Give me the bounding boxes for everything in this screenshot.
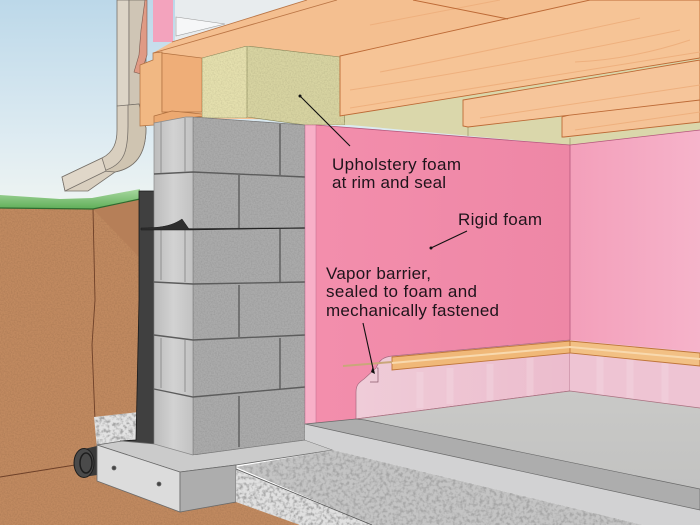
pink rigid foam wall <box>305 125 700 424</box>
sky <box>0 0 700 205</box>
gravel front <box>236 469 372 525</box>
upper house background <box>153 0 310 42</box>
callout: vapor barrier: mechanically fastened <box>326 301 499 320</box>
second joist <box>463 60 700 127</box>
slab light edge <box>305 424 700 525</box>
callout: upholstery foam: Upholstery foam <box>332 155 461 174</box>
slab surface <box>356 391 700 489</box>
right wall <box>570 130 700 408</box>
joists <box>340 0 700 137</box>
icon: gutter strap <box>134 0 147 74</box>
first joist <box>340 0 700 116</box>
downspout <box>62 0 146 191</box>
block wall <box>141 117 305 455</box>
soil <box>0 199 300 525</box>
gravel top <box>236 450 643 525</box>
callout: vapor barrier: sealed to foam and <box>326 282 477 301</box>
wood cavity <box>162 53 202 112</box>
grass <box>0 189 140 209</box>
slab dark edge <box>305 419 700 510</box>
wood furring strip <box>343 341 700 370</box>
callout: rigid foam <box>430 210 542 250</box>
footing bolts <box>112 466 116 470</box>
subfloor <box>153 0 700 120</box>
callout: rigid foam: Rigid foam <box>458 210 542 229</box>
callout: upholstery foam <box>298 94 461 192</box>
callout: upholstery foam: at rim and seal <box>332 173 446 192</box>
foam edge <box>305 125 316 424</box>
sill <box>154 111 212 124</box>
rim edge lines <box>153 0 337 53</box>
floor framing <box>140 0 700 126</box>
block front face <box>193 117 305 455</box>
callout: vapor barrier: Vapor barrier, <box>326 264 431 283</box>
gravel behind footing <box>94 412 139 449</box>
block end faces <box>154 117 193 455</box>
left wall <box>316 125 570 424</box>
third joist <box>562 80 700 137</box>
drain pipe <box>74 446 97 478</box>
black waterproof membrane <box>120 191 154 446</box>
rim joist <box>140 52 212 126</box>
concrete slab and gravel <box>236 391 700 525</box>
callout: vapor barrier <box>326 264 499 374</box>
wood grain <box>350 0 700 130</box>
footing <box>97 440 333 512</box>
vapor barrier <box>356 340 700 419</box>
green upholstery foam <box>202 0 700 146</box>
